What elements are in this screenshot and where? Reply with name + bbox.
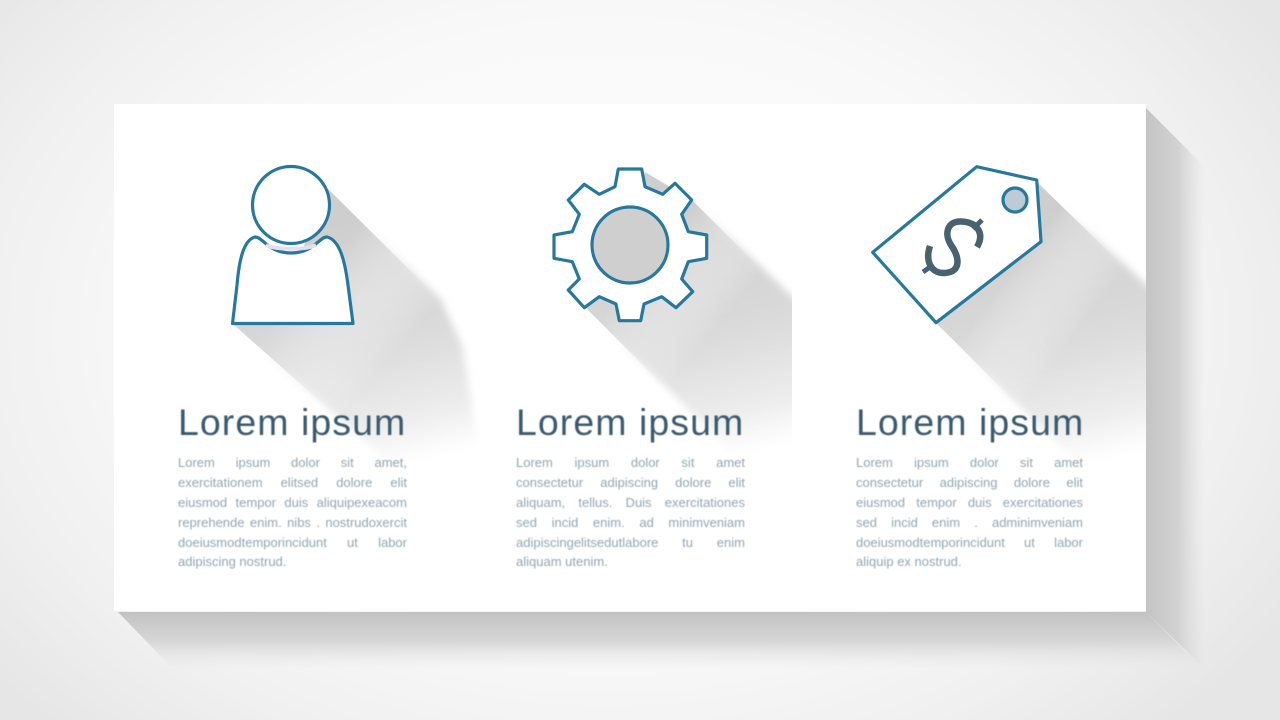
body text 1: adipiscing nostrud. — [178, 554, 286, 569]
heading 3: Lorem ipsum — [856, 401, 1084, 443]
icon: person — [232, 166, 353, 324]
body text 3: doeiusmodtemporincidunt ut labor — [856, 535, 1083, 550]
body text 2: adipiscingelitsedutlabore tu enim — [516, 535, 745, 550]
body text 1: doeiusmodtemporincidunt ut labor — [178, 535, 407, 550]
body text 3: eiusmod tempor duis exercitationes — [856, 495, 1083, 510]
panel: white card — [114, 104, 1146, 611]
heading 1: Lorem ipsum — [178, 401, 406, 443]
body text 3: Lorem ipsum dolor sit amet — [856, 455, 1083, 470]
body text 2: aliquam, tellus. Duis exercitationes — [516, 495, 745, 510]
body text 2: sed incid enim. ad minimveniam — [516, 515, 745, 530]
column 2 text — [516, 401, 746, 569]
icon: price tag — [873, 167, 1041, 323]
long shadow: gear — [586, 172, 792, 437]
body text 1: Lorem ipsum dolor sit amet, — [178, 455, 407, 470]
body text 1: exercitationem elitsed dolore elit — [178, 475, 407, 490]
body text 1: eiusmod tempor duis aliquipexeacom — [178, 495, 407, 510]
body text 2: consectetur adipiscing dolore elit — [516, 475, 745, 490]
body text 1 — [178, 455, 408, 570]
body text 1: reprehende enim. nibs . nostrudoxercit — [178, 515, 407, 530]
column 3 text — [856, 401, 1084, 569]
body text 2: aliquam utenim. — [516, 554, 608, 569]
body text 3 — [856, 455, 1084, 569]
body text 3: sed incid enim . adminimveniam — [856, 515, 1083, 530]
column 1 text — [178, 401, 408, 570]
heading 2: Lorem ipsum — [516, 401, 744, 443]
artwork: panel, shadows and icons — [114, 104, 1196, 660]
long shadow: person — [234, 188, 472, 448]
body text 2 — [516, 455, 746, 569]
body text 3: consectetur adipiscing dolore elit — [856, 475, 1083, 490]
body text 2: Lorem ipsum dolor sit amet — [516, 455, 745, 470]
panel shadow: bottom — [118, 612, 1204, 670]
panel shadow: right — [1146, 108, 1204, 668]
long shadow: price tag — [937, 184, 1146, 446]
body text 3: aliquip ex nostrud. — [856, 554, 962, 569]
icon: gear — [554, 169, 707, 321]
